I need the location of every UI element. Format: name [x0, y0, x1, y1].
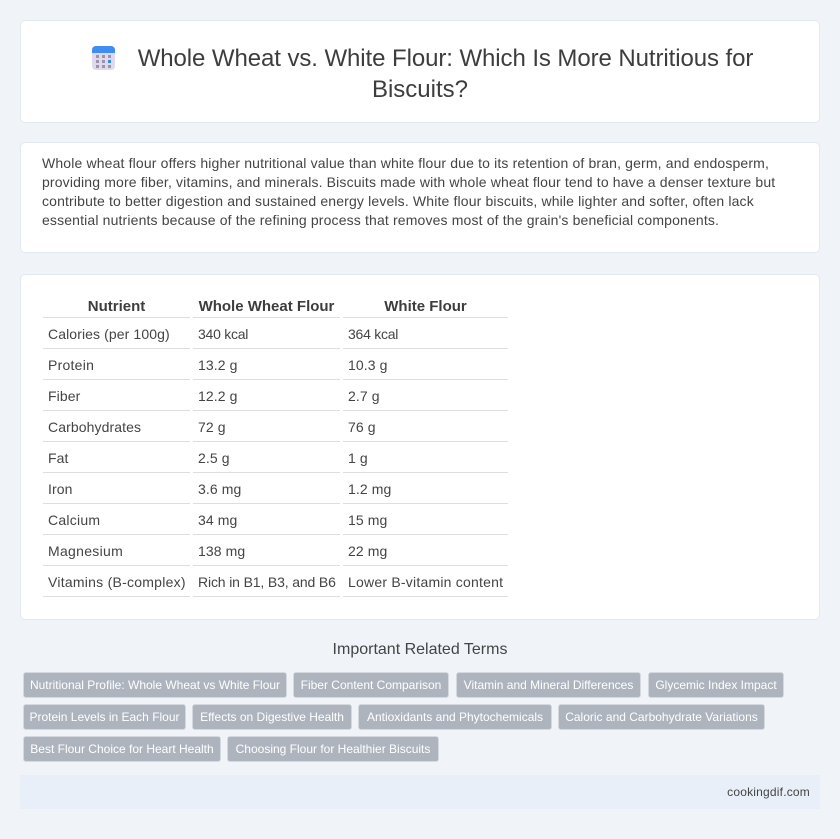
- nutrition comparison table: 340 kcal: [198, 326, 248, 342]
- nutrition comparison table: Carbohydrates: [48, 419, 141, 435]
- nutrition comparison table: Magnesium: [48, 543, 123, 559]
- nutrition comparison table: 12.2 g: [198, 388, 238, 404]
- intro text: providing more fiber, vitamins, and minerals. Biscuits made with whole wheat flour tend to have a denser texture but: [42, 174, 775, 190]
- nutrition comparison table: 364 kcal: [348, 326, 398, 342]
- nutrition comparison table: 1.2 mg: [348, 481, 391, 497]
- table panel: [20, 274, 820, 620]
- related terms tags: Glycemic Index Impact: [655, 678, 777, 692]
- nutrition comparison table: Calcium: [48, 512, 100, 528]
- title: Whole Wheat vs. White Flour: Which Is More Nutritious for: [138, 45, 753, 72]
- nutrition comparison table: 13.2 g: [198, 357, 238, 373]
- related terms tags: Effects on Digestive Health: [200, 710, 344, 724]
- title: Biscuits?: [372, 76, 468, 103]
- header panel: [20, 20, 820, 123]
- related terms tags: Fiber Content Comparison: [301, 678, 441, 692]
- related terms tags: [23, 672, 784, 762]
- nutrition comparison table: 3.6 mg: [198, 481, 241, 497]
- nutrition comparison table: 15 mg: [348, 512, 387, 528]
- nutrition comparison table: [43, 298, 508, 597]
- table header: Nutrient: [88, 298, 145, 315]
- nutrition comparison table: Lower B-vitamin content: [348, 574, 503, 590]
- nutrition comparison table: Fat: [48, 450, 69, 466]
- icon: calendar grid: [92, 46, 115, 70]
- related terms tags: Caloric and Carbohydrate Variations: [565, 710, 758, 724]
- intro text: Whole wheat flour offers higher nutritional value than white flour due to its retention of bran, germ, and endosperm,: [42, 155, 769, 171]
- related terms tags: Vitamin and Mineral Differences: [464, 678, 633, 692]
- title: [138, 45, 753, 103]
- related terms tags: Antioxidants and Phytochemicals: [367, 710, 543, 724]
- table header: [88, 298, 467, 315]
- nutrition comparison table: Vitamins (B-complex): [48, 574, 186, 590]
- nutrition comparison table: Rich in B1, B3, and B6: [198, 574, 336, 590]
- nutrition comparison table: 10.3 g: [348, 357, 388, 373]
- nutrition comparison table: 2.5 g: [198, 450, 230, 466]
- table header: Whole Wheat Flour: [199, 298, 334, 315]
- related terms tags: Choosing Flour for Healthier Biscuits: [236, 742, 430, 756]
- nutrition comparison table: 2.7 g: [348, 388, 380, 404]
- nutrition comparison table: 76 g: [348, 419, 376, 435]
- related terms tags: Nutritional Profile: Whole Wheat vs White Flour: [30, 678, 280, 692]
- nutrition comparison table: Protein: [48, 357, 94, 373]
- nutrition comparison table: 34 mg: [198, 512, 237, 528]
- intro panel: [20, 142, 820, 253]
- nutrition comparison table: Fiber: [48, 388, 80, 404]
- intro text: contribute to better digestion and sustained energy levels. White flour biscuits, while lighter and softer, often lack: [42, 193, 754, 209]
- intro text: essential nutrients because of the refining process that removes most of the grain's beneficial components.: [42, 212, 719, 228]
- nutrition comparison table: 138 mg: [198, 543, 245, 559]
- related terms tags: Best Flour Choice for Heart Health: [30, 742, 214, 756]
- nutrition comparison table: 72 g: [198, 419, 226, 435]
- nutrition comparison table: Calories (per 100g): [48, 326, 170, 342]
- intro text: [42, 155, 776, 228]
- related terms tags: Protein Levels in Each Flour: [29, 710, 180, 724]
- footer source text: cookingdif.com: [727, 785, 810, 799]
- nutrition comparison table: Iron: [48, 481, 73, 497]
- footer bar: [20, 775, 820, 809]
- related terms heading: Important Related Terms: [333, 641, 507, 658]
- table header: White Flour: [384, 298, 467, 315]
- nutrition comparison table: 22 mg: [348, 543, 387, 559]
- nutrition comparison table: 1 g: [348, 450, 368, 466]
